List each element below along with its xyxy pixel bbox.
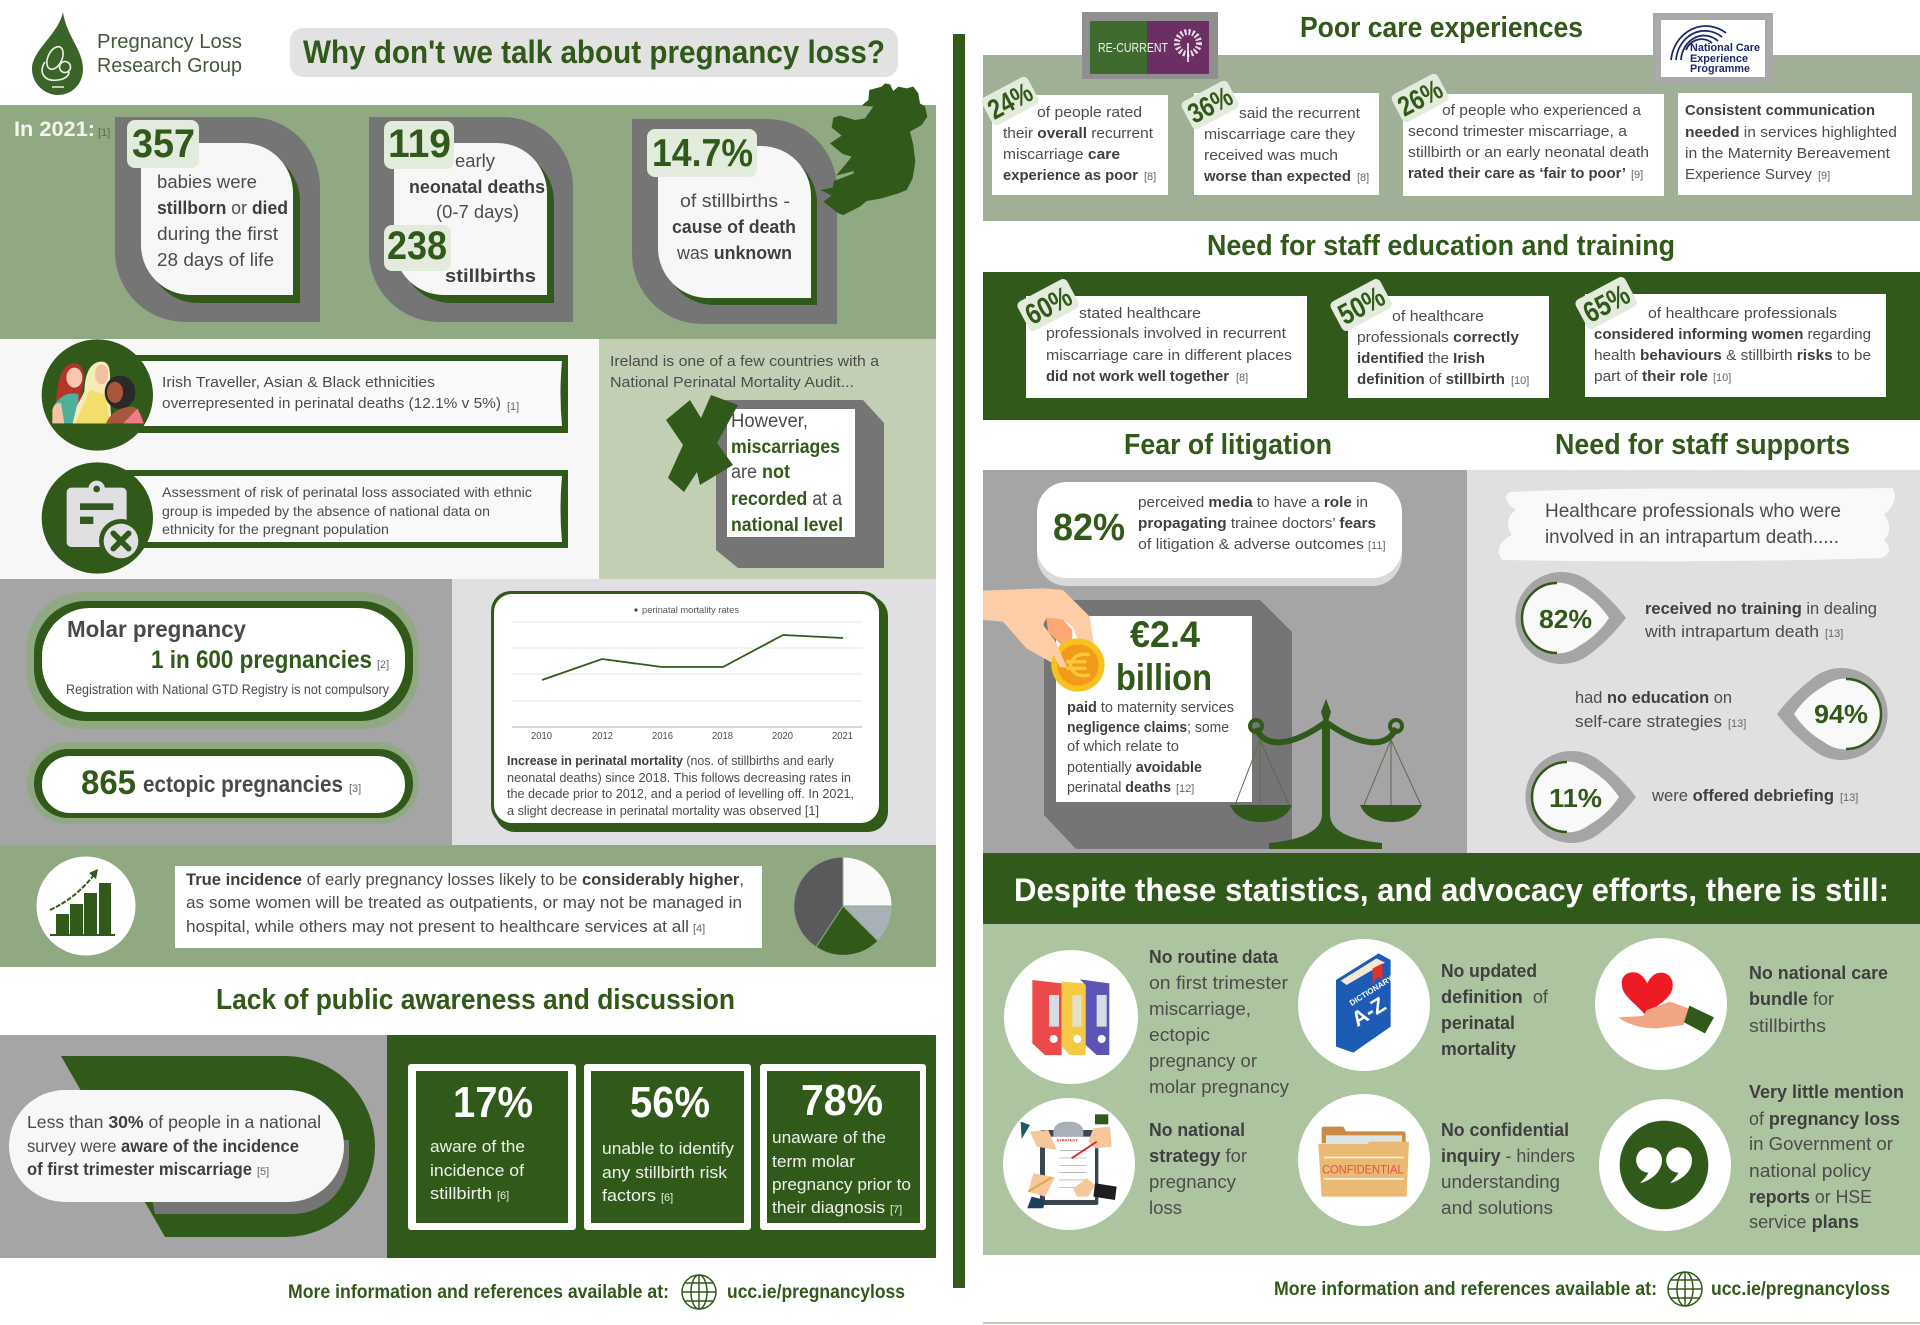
stat box: 78%: their diagnosis [772, 1198, 885, 1217]
callout: 2.4 billion: €2.4 [1130, 614, 1200, 655]
callout: 2.4 billion [1044, 600, 1292, 849]
panel: national perinatal mortality audit: Ireland is one of a few countries with a [610, 353, 880, 370]
item: no routine data: miscarriage, [1149, 999, 1251, 1019]
stat card: 60%: miscarriage care in different places [1046, 347, 1292, 364]
item: no confidential inquiry: No confidential [1441, 1120, 1569, 1140]
icon: scales of justice [1230, 699, 1422, 849]
stat box: 56%: factors [602, 1186, 656, 1205]
stat card: 26% [1390, 72, 1664, 196]
callout: molar pregnancy: Molar pregnancy [67, 616, 246, 642]
stat: 94% no education [1575, 668, 1888, 760]
callout: 2.4 billion: of which relate to [1067, 739, 1179, 755]
text card: consistent communication: in the Maternity Bereavement [1685, 145, 1891, 162]
stat card: 65%: health behaviours & stillbirth risks to be [1594, 347, 1871, 364]
stat box: 78%: [7] [890, 1204, 902, 1216]
card: 14.7% of stillbirths: 14.7% [652, 132, 753, 175]
panel: national perinatal mortality audit [599, 339, 936, 579]
stat card: 36%: 36% [1183, 80, 1238, 129]
card: 119 early neonatal deaths and 238 stillbirths: neonatal deaths [409, 177, 545, 197]
stat card: 24%: 24% [983, 76, 1038, 125]
stat card: 26%: of people who experienced a [1442, 102, 1642, 119]
callout: 82% media role: perceived media to have a role in [1138, 494, 1368, 511]
item: no routine data: molar pregnancy [1149, 1077, 1289, 1097]
item: no national strategy [1003, 1098, 1247, 1230]
stat card: 65%: [10] [1713, 372, 1731, 384]
footer: right references link [1274, 1272, 1890, 1306]
item: very little mention: service plans [1749, 1212, 1859, 1232]
heading: poor care experiences: Poor care experiences [1300, 12, 1583, 44]
logo: National Care Experience Programme: Experience [1690, 53, 1748, 65]
card: 357 babies: 357 [132, 122, 195, 166]
title: Why don't we talk about pregnancy loss? [303, 34, 885, 70]
stat card: 60% [1016, 277, 1307, 398]
icon: clipboard with cross [42, 462, 153, 574]
footer: right references link: More information and references available at: [1274, 1279, 1657, 1300]
banner: healthcare professionals: involved in an intrapartum death..... [1545, 526, 1839, 548]
stat: 94% no education: had no education on [1575, 688, 1732, 707]
card: 119 early neonatal deaths and 238 stillbirths: stillbirths [445, 266, 536, 286]
callout: less than 30%: [5] [257, 1166, 269, 1178]
stat card: 50% [1329, 277, 1549, 398]
text: chart description: a slight decrease in perinatal mortality was observed [1] [507, 803, 819, 818]
stat card: 26%: [9] [1631, 169, 1643, 181]
callout: 2.4 billion: potentially avoidable [1067, 760, 1202, 776]
text: true incidence: hospital, while others may not present to healthcare services at all [186, 918, 689, 936]
stat card: 36%: worse than expected [1203, 168, 1351, 185]
stat card: 26%: rated their care as ‘fair to poor’ [1408, 165, 1626, 182]
stat box: 56% [584, 1064, 751, 1230]
stat card: 60%: did not work well together [1046, 368, 1229, 385]
card: 357 babies: during the first [157, 224, 278, 244]
panel: need for staff supports [1467, 470, 1920, 853]
item: no national strategy: pregnancy [1149, 1172, 1236, 1192]
item: no national care bundle: stillbirths [1749, 1016, 1826, 1036]
line chart: perinatal mortality rates: 2016 [652, 731, 673, 742]
panel: national perinatal mortality audit: National Perinatal Mortality Audit... [610, 374, 854, 391]
callout: 2.4 billion: billion [1116, 657, 1212, 698]
text: chart description [507, 753, 854, 818]
stat card: 24%: miscarriage care [1003, 146, 1120, 163]
item: no national care bundle: No national care [1749, 963, 1888, 983]
callout: 82% media role: propagating trainee doctors’ fears [1138, 515, 1376, 532]
text card: consistent communication [1678, 93, 1912, 195]
item: no national strategy: STRATEGY [1057, 1137, 1078, 1142]
stat card: 26%: 26% [1393, 73, 1448, 122]
card: 357 babies: babies were [157, 172, 257, 192]
title [290, 28, 898, 77]
stat box: 17% [408, 1064, 576, 1230]
stat box: 56%: any stillbirth risk [602, 1163, 728, 1182]
stat box: 17%: incidence of [430, 1161, 524, 1180]
card: 119 early neonatal deaths and 238 stillbirths: 238 [387, 224, 447, 268]
callout: molar pregnancy [27, 592, 419, 729]
heading: staff education and training: Need for staff education and training [1207, 230, 1675, 262]
callout: molar pregnancy: 1 in 600 pregnancies [151, 646, 372, 674]
stat: 11% debriefing: [13] [1840, 792, 1858, 804]
stat: 82% no training: received no training in dealing [1645, 599, 1877, 618]
card: 357 babies: stillborn or died [157, 198, 288, 218]
icon: rising bar chart [36, 856, 136, 956]
card: 357 babies: 28 days of life [157, 250, 274, 270]
stat: 11% debriefing: 11% [1549, 783, 1602, 813]
callout: 82% media role: 82% [1053, 507, 1125, 549]
item: no confidential inquiry: inquiry - hinders [1441, 1146, 1575, 1166]
panel: survey awareness [0, 1035, 387, 1258]
card: 14.7% of stillbirths: was unknown [676, 243, 792, 263]
line chart: perinatal mortality rates: 2020 [772, 731, 793, 742]
callout: ethnicities overrepresented: Irish Traveller, Asian & Black ethnicities [162, 374, 435, 391]
item: no national care bundle: bundle for [1749, 989, 1834, 1009]
stat: 11% debriefing [1525, 751, 1858, 843]
callout: less than 30%: survey were aware of the incidence [27, 1136, 299, 1156]
heading: lack of public awareness: Lack of public awareness and discussion [216, 984, 735, 1016]
card: 357 babies [115, 117, 320, 322]
item: no updated definition: DICTIONARY [1348, 974, 1395, 1008]
stat: 82% no training [1515, 572, 1877, 664]
stat card: 65% [1574, 275, 1886, 397]
callout: miscarriages not recorded [716, 400, 884, 568]
stat box: 56%: [6] [661, 1192, 673, 1204]
callout: absence of national data on ethnicity: group is impeded by the absence of national data on [162, 503, 490, 519]
line chart: perinatal mortality rates: 2021 [832, 731, 853, 742]
stat box: 78%: pregnancy prior to [772, 1175, 911, 1194]
stat box: 78%: unaware of the [772, 1128, 886, 1147]
text: chart description: Increase in perinatal mortality (nos. of stillbirths and early [507, 753, 834, 768]
logo: RE-CURRENT: RE-CURRENT [1098, 40, 1168, 55]
text: chart description: neonatal deaths) since 2018. This follows decreasing rates in [507, 770, 851, 785]
item: very little mention: in Government or [1749, 1134, 1893, 1154]
stat card: 26%: second trimester miscarriage, a [1408, 123, 1628, 140]
banner: despite these statistics: Despite these statistics, and advocacy efforts, there is still: [1014, 872, 1889, 908]
stat card: 50%: identified the Irish [1357, 350, 1485, 367]
heading: need for staff supports: Need for staff supports [1555, 429, 1850, 461]
callout: ectopic pregnancies [27, 742, 419, 824]
item: no updated definition: mortality [1441, 1039, 1516, 1059]
line chart: perinatal mortality rates: perinatal mortality rates [642, 605, 739, 616]
stat card: 60%: professionals involved in recurrent [1046, 325, 1287, 342]
panel: awareness statistics [387, 1035, 936, 1258]
stat card: 24% [980, 75, 1168, 195]
stat card: 50%: of healthcare [1392, 308, 1484, 325]
item: no routine data: ectopic [1149, 1025, 1210, 1045]
item: no routine data: pregnancy or [1149, 1051, 1257, 1071]
footer: left references link: ucc.ie/pregnancyloss [727, 1282, 905, 1303]
panel: staff education [983, 272, 1920, 420]
stat card: 50%: [10] [1511, 375, 1529, 387]
stat card: 60%: stated healthcare [1079, 305, 1201, 322]
heading: In 2021: [1] [98, 127, 110, 139]
stat card: 65%: of healthcare professionals [1648, 305, 1837, 322]
stat: 82% no training: 82% [1539, 604, 1592, 634]
icon: map of Ireland [821, 83, 927, 215]
callout: molar pregnancy: [2] [377, 659, 389, 671]
stat box: 56%: unable to identify [602, 1139, 735, 1158]
callout: absence of national data on ethnicity: ethnicity for the pregnant population [162, 521, 389, 537]
line chart: perinatal mortality rates: 2018 [712, 731, 733, 742]
text: true incidence: [4] [693, 923, 705, 935]
chart: pie [794, 857, 892, 955]
panel: ethnicity [0, 339, 600, 579]
panel: true incidence [0, 845, 936, 967]
item: no national strategy: No national [1149, 1120, 1245, 1140]
stat: 94% no education: 94% [1814, 699, 1868, 729]
stat card: 50%: 50% [1333, 281, 1391, 332]
callout: 2.4 billion: paid to maternity services [1067, 700, 1234, 716]
callout: ethnicities overrepresented: [1] [507, 401, 519, 413]
callout: 82% media role: of litigation & adverse outcomes [1138, 536, 1364, 553]
logo: National Care Experience Programme [1653, 13, 1773, 83]
callout: miscarriages not recorded: However, [731, 411, 808, 432]
item: very little mention [1599, 1082, 1904, 1232]
logo: Pregnancy Loss Research Group [32, 12, 242, 95]
item: no routine data: No routine data [1149, 947, 1279, 967]
panel: perinatal mortality trend [452, 579, 936, 845]
card: 14.7% of stillbirths: of stillbirths - [680, 191, 790, 211]
stat box: 17%: stillbirth [430, 1184, 492, 1203]
callout: absence of national data on ethnicity [120, 470, 568, 548]
text: true incidence [175, 866, 762, 948]
line chart: perinatal mortality rates: 2010 [531, 731, 552, 742]
text card: consistent communication: [9] [1818, 170, 1830, 182]
callout: absence of national data on ethnicity: Assessment of risk of perinatal loss associated with ethnic [162, 484, 532, 500]
callout: miscarriages not recorded: recorded at a [731, 489, 842, 510]
card: 119 early neonatal deaths and 238 stillbirths: early [455, 151, 495, 171]
item: very little mention: reports or HSE [1749, 1187, 1872, 1207]
item: very little mention: national policy [1749, 1161, 1871, 1181]
footer: right references link: ucc.ie/pregnancyloss [1711, 1279, 1890, 1300]
banner: healthcare professionals [1499, 488, 1895, 561]
item: no updated definition [1298, 939, 1549, 1071]
card: 119 early neonatal deaths and 238 stillbirths [369, 117, 573, 322]
callout: ectopic pregnancies: [3] [349, 783, 361, 795]
icon: hand holding coin [983, 588, 1105, 692]
text card: consistent communication: Consistent communication [1685, 102, 1875, 119]
stat card: 24%: their overall recurrent [1003, 125, 1154, 142]
stat: 11% debriefing: were offered debriefing [1651, 786, 1834, 805]
stat: 94% no education: self-care strategies [1575, 712, 1722, 731]
card: 14.7% of stillbirths: cause of death [672, 217, 796, 237]
item: no routine data [1004, 947, 1289, 1097]
stat card: 26%: stillbirth or an early neonatal death [1408, 144, 1649, 161]
item: no updated definition: A-Z [1347, 992, 1390, 1032]
text card: consistent communication: Experience Survey [1685, 166, 1812, 183]
stat box: 78%: term molar [772, 1152, 855, 1171]
stat box: 56%: 56% [630, 1078, 710, 1127]
callout: ethnicities overrepresented: overrepresented in perinatal deaths (12.1% v 5%) [162, 395, 501, 412]
item: no confidential inquiry [1298, 1094, 1575, 1226]
logo: Pregnancy Loss Research Group: Pregnancy Loss [97, 31, 242, 53]
stat: 94% no education: [13] [1728, 718, 1746, 730]
item: no routine data: on first trimester [1149, 973, 1288, 993]
text: true incidence: as some women will be treated as outpatients, or may not be managed in [186, 894, 742, 912]
text: true incidence: True incidence of early pregnancy losses likely to be considerably higher, [186, 871, 744, 889]
callout: 2.4 billion: negligence claims; some [1067, 720, 1229, 736]
item: no confidential inquiry: CONFIDENTIAL [1322, 1162, 1404, 1176]
stat card: 36% [1180, 79, 1379, 195]
stat card: 60%: 60% [1020, 281, 1078, 332]
callout: 2.4 billion: [12] [1176, 783, 1194, 795]
panel: In 2021 statistics [0, 83, 936, 339]
logo: National Care Experience Programme: Programme [1690, 63, 1750, 75]
heading: fear of litigation: Fear of litigation [1124, 429, 1332, 461]
item: no national strategy: loss [1149, 1198, 1182, 1218]
callout: ethnicities overrepresented [135, 355, 568, 433]
stat card: 24%: of people rated [1037, 104, 1142, 121]
icon: cross [666, 395, 738, 492]
callout: miscarriages not recorded: are not [731, 462, 791, 483]
line chart: perinatal mortality rates [512, 605, 862, 742]
item: no confidential inquiry: understanding [1441, 1172, 1560, 1192]
banner: healthcare professionals: Healthcare professionals who were [1545, 500, 1841, 522]
stat: 82% no training: [13] [1825, 628, 1843, 640]
item: no updated definition: perinatal [1441, 1013, 1515, 1033]
stat card: 50%: definition of stillbirth [1357, 371, 1505, 388]
heading: In 2021: In 2021: [14, 118, 95, 141]
stat card: 36%: miscarriage care they [1204, 126, 1356, 143]
item: very little mention: Very little mention [1749, 1082, 1904, 1102]
card: 14.7% of stillbirths [632, 119, 837, 324]
stat box: 17%: aware of the [430, 1137, 525, 1156]
logo: National Care Experience Programme: National Care [1690, 42, 1760, 54]
item: no updated definition: definition of [1441, 987, 1549, 1007]
callout: 82% media role [1037, 482, 1402, 586]
callout: less than 30% [9, 1090, 344, 1202]
logo: RE-CURRENT [1082, 12, 1218, 79]
callout: less than 30%: Less than 30% of people in a national [27, 1112, 321, 1132]
panel: fear of litigation [983, 470, 1467, 853]
banner: despite these statistics [983, 853, 1920, 924]
stat box: 17%: 17% [453, 1078, 533, 1127]
card: 119 early neonatal deaths and 238 stillbirths: 119 [388, 122, 451, 166]
divider [953, 34, 965, 1288]
stat box: 17%: [6] [497, 1190, 509, 1202]
item: no national care bundle [1595, 938, 1888, 1070]
stat card: 24%: experience as poor [1003, 167, 1138, 184]
stat: 82% no training: with intrapartum death [1644, 622, 1819, 641]
stat box: 78%: 78% [801, 1076, 883, 1125]
footer: left references link: More information and references available at: [288, 1282, 669, 1303]
callout: ectopic pregnancies: 865 [81, 764, 136, 802]
item: no updated definition: No updated [1441, 961, 1537, 981]
panel: molar and ectopic pregnancies [0, 579, 452, 845]
callout: molar pregnancy: Registration with National GTD Registry is not compulsory [66, 682, 389, 697]
footer: left references link [288, 1275, 905, 1309]
text card: consistent communication: needed in services highlighted [1685, 124, 1897, 141]
stat card: 24%: [8] [1144, 171, 1156, 183]
stat card: 36%: received was much [1204, 147, 1338, 164]
item: no national strategy: strategy for [1149, 1146, 1247, 1166]
line chart: perinatal mortality rates: 2012 [592, 731, 613, 742]
stat card: 60%: [8] [1236, 372, 1248, 384]
stat card: 36%: [8] [1357, 172, 1369, 184]
callout: 82% media role: [11] [1368, 540, 1386, 552]
callout: miscarriages not recorded: miscarriages [731, 437, 840, 458]
item: no confidential inquiry: and solutions [1441, 1198, 1553, 1218]
stat card: 36%: said the recurrent [1239, 105, 1361, 122]
stat card: 65%: considered informing women regarding [1594, 326, 1871, 343]
card: 119 early neonatal deaths and 238 stillbirths: (0-7 days) [436, 202, 519, 222]
icon: three women [42, 339, 153, 451]
panel: poor care experiences [980, 12, 1920, 221]
stat card: 50%: professionals correctly [1357, 329, 1520, 346]
stat card: 65%: part of their role [1594, 368, 1708, 385]
logo: Pregnancy Loss Research Group: Research Group [97, 55, 242, 77]
callout: miscarriages not recorded: national level [731, 515, 843, 536]
callout: ectopic pregnancies: ectopic pregnancies [143, 771, 343, 797]
text: chart description: the decade prior to 2012, and a period of levelling off. In 2021, [507, 786, 854, 801]
stat box: 78% [760, 1064, 926, 1230]
panel: gaps remaining [983, 924, 1920, 1255]
callout: less than 30%: of first trimester miscarriage [27, 1159, 252, 1179]
callout: 2.4 billion: perinatal deaths [1067, 780, 1171, 796]
stat card: 65%: 65% [1578, 279, 1636, 330]
item: very little mention: of pregnancy loss [1749, 1109, 1900, 1129]
